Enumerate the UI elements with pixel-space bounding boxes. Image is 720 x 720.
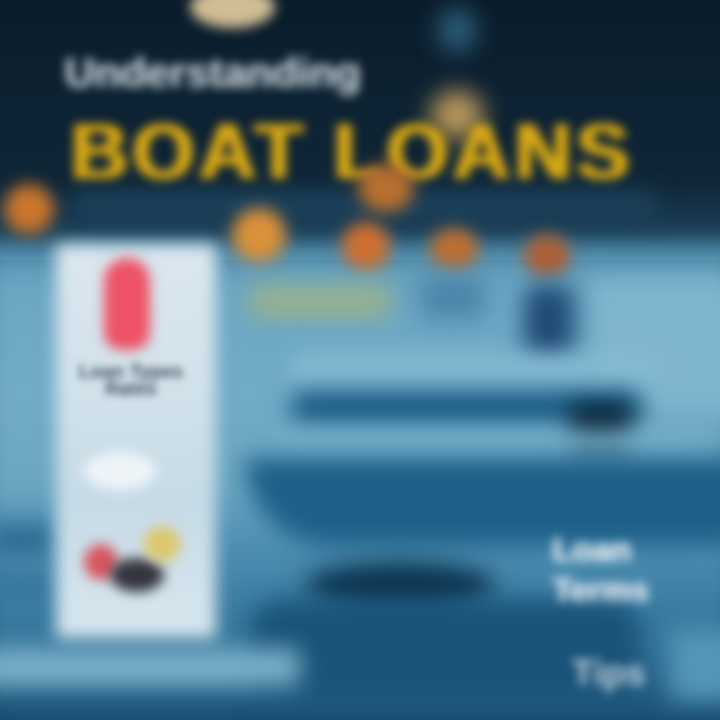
boat shadow on water	[305, 562, 495, 610]
left water stripe	[0, 525, 55, 553]
icon: colourful badge	[76, 518, 188, 602]
step icon: orange circle 5	[524, 234, 570, 276]
step icon: orange circle 3	[342, 222, 390, 270]
step label: blue caption	[420, 275, 485, 319]
yellow segment	[144, 526, 180, 562]
panel: loan factors	[56, 244, 216, 638]
left water stripe lower	[0, 575, 55, 597]
text: pin caption: Loan Types	[79, 362, 183, 383]
boat dark window	[570, 404, 630, 452]
text: pin caption	[74, 359, 187, 400]
boat cabin roof	[290, 355, 660, 395]
bottom water foreground	[0, 648, 300, 686]
step label: yellow-green caption	[250, 285, 390, 317]
lower right light water	[670, 630, 720, 700]
moon glow	[190, 0, 275, 28]
lamp light	[430, 90, 484, 140]
icon: white cloud	[84, 452, 156, 490]
figure on boat	[524, 285, 574, 360]
boat hull	[245, 458, 720, 546]
boat deck	[275, 430, 695, 456]
step icon: orange circle 4	[430, 228, 478, 270]
red segment	[84, 544, 118, 580]
text: bottom right white caption: Tips	[572, 652, 645, 693]
subtitle band	[75, 194, 655, 218]
text: lower right white caption: Loan	[552, 531, 631, 568]
text: pin caption: Rates	[105, 379, 157, 400]
title: BOAT LOANS: BOAT LOANS	[70, 107, 633, 196]
deep water reflection	[250, 600, 640, 700]
text: lower right white caption: Terms	[552, 571, 649, 608]
hanging lamp	[438, 8, 476, 53]
background: water	[0, 245, 720, 720]
text: lower right white caption	[546, 531, 655, 608]
boat windows	[292, 390, 642, 426]
step icon: orange circle 2	[232, 208, 286, 262]
step icon: orange circle 1	[4, 184, 54, 234]
icon: red location pin	[104, 258, 150, 350]
boat illustration	[233, 339, 720, 610]
right side light water	[590, 280, 720, 410]
background: night sky	[0, 0, 720, 260]
panel content: icons and text	[74, 250, 188, 602]
heading: Understanding: Understanding	[64, 49, 360, 96]
step icon: orange circle top	[358, 164, 414, 212]
dark segment	[110, 558, 164, 592]
